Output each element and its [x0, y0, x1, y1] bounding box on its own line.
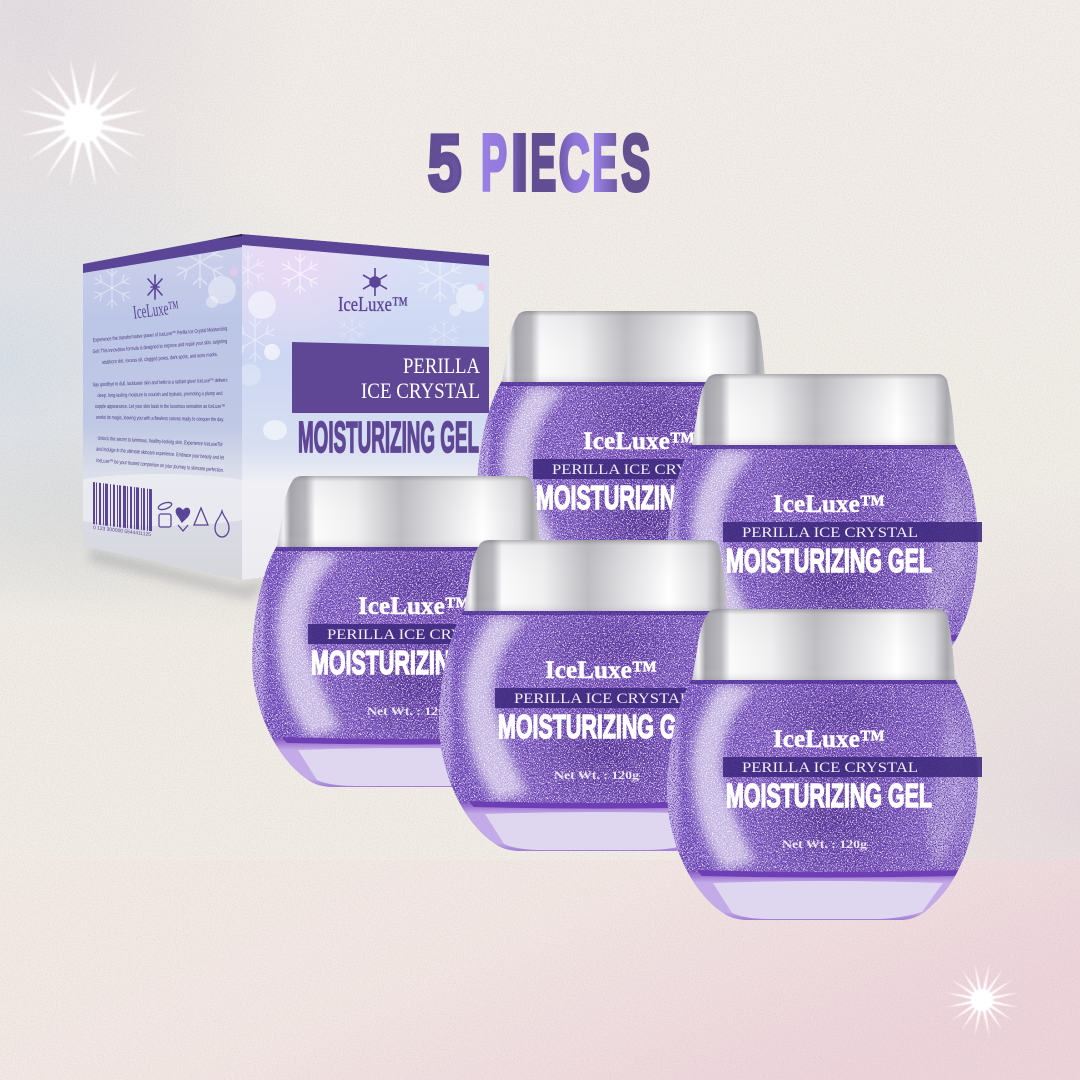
jar: back right: PERILLA ICE CRYSTAL — [742, 525, 918, 541]
jar: front center: MOISTURIZING GEL — [498, 708, 704, 745]
jar: back center: MOISTURIZING GEL — [536, 479, 742, 516]
jar: front right: MOISTURIZING GEL — [726, 777, 932, 814]
icon: large sparkle star top left — [18, 58, 148, 188]
box side description text: stubborn dirt, excess oil, clogged pores, dark spots, and acne marks. — [102, 352, 218, 366]
title: 5 PIECES: S — [621, 118, 650, 207]
title: 5 PIECES: E — [592, 118, 617, 207]
jar: front center — [432, 540, 762, 856]
jar: middle left: PERILLA ICE CRYSTAL — [327, 627, 503, 643]
jar: middle left: Net Wt. : 120g — [367, 704, 452, 718]
jar: front right: IceLuxe™ — [773, 726, 885, 753]
jar: front center: Net Wt. : 120g — [554, 768, 639, 782]
jar: middle left: IceLuxe™ — [358, 593, 470, 620]
box ground shadow — [90, 548, 270, 600]
title: 5 PIECES: I — [510, 118, 528, 207]
jar: front center: IceLuxe™ — [545, 657, 657, 684]
box side description text: Unlock the secret to luminous, healthy-looking skin. Experience IceLuxeTM — [97, 436, 223, 448]
box purple label: PERILLA — [403, 353, 480, 378]
jar: back right — [660, 374, 990, 690]
title: 5 PIECES — [428, 118, 650, 207]
box side description text: supple appearance. Let your skin bask in the luxurious sensation as IceLuxe™ — [95, 404, 225, 410]
box side description text — [92, 326, 228, 474]
jar: front right — [660, 609, 990, 925]
text: MOISTURIZING GEL — [298, 413, 479, 462]
box left face — [83, 234, 242, 580]
box logo text: IceLuxe™ — [338, 292, 408, 316]
box logo icon — [363, 268, 387, 296]
title: 5 PIECES: 5 — [428, 118, 462, 207]
jar: middle left: MOISTURIZING GEL — [311, 644, 517, 681]
barcode — [93, 482, 152, 538]
box side description text: works its magic, leaving you with a flawless canvas ready to conquer the day. — [95, 415, 224, 423]
jar: back center: PERILLA ICE CRYSTAL — [552, 462, 728, 478]
jar: back center: IceLuxe™ — [583, 428, 695, 455]
box side description text: deep, long-lasting moisture to nourish and hydrate, promoting a plump and — [97, 391, 223, 399]
jar: front right: PERILLA ICE CRYSTAL — [742, 760, 918, 776]
box right face — [232, 234, 489, 580]
jar: middle left — [245, 476, 575, 792]
box side description text: Experience the transformative power of IceLuxe™ Perilla Ice Crystal Moisturizing — [92, 326, 228, 344]
box purple label — [292, 342, 489, 413]
icon: small sparkle star bottom right — [946, 964, 1018, 1036]
icons: packaging symbols — [157, 501, 229, 537]
product box — [83, 234, 489, 602]
box side description text: IceLuxe™ be your trusted companion on your journey to skincare perfection. — [96, 458, 224, 474]
jar: back right: IceLuxe™ — [773, 491, 885, 518]
box side description text: and indulge in the ultimate skincare experience. Embrace your beauty and let — [96, 447, 224, 461]
jar: back right: MOISTURIZING GEL — [726, 542, 932, 579]
jar: front center: PERILLA ICE CRYSTAL — [514, 691, 690, 707]
title: 5 PIECES: P — [481, 118, 507, 207]
box side logo: IceLuxe™ — [132, 297, 180, 324]
barcode: 0 123 300000 5544411125 — [93, 525, 151, 538]
box side logo — [132, 275, 180, 324]
jar: back center — [470, 311, 800, 627]
box purple label: ICE CRYSTAL — [361, 378, 480, 403]
jar: front right: Net Wt. : 120g — [782, 837, 867, 851]
box side description text: Gel! This innovative formula is designed to improve and repair your skin, targeting — [92, 339, 228, 355]
title: 5 PIECES: C — [559, 118, 590, 207]
box side description text: Say goodbye to dull, lackluster skin and hello to a radiant glow! IceLuxe™ delivers — [92, 378, 228, 388]
title: 5 PIECES: E — [530, 118, 556, 207]
